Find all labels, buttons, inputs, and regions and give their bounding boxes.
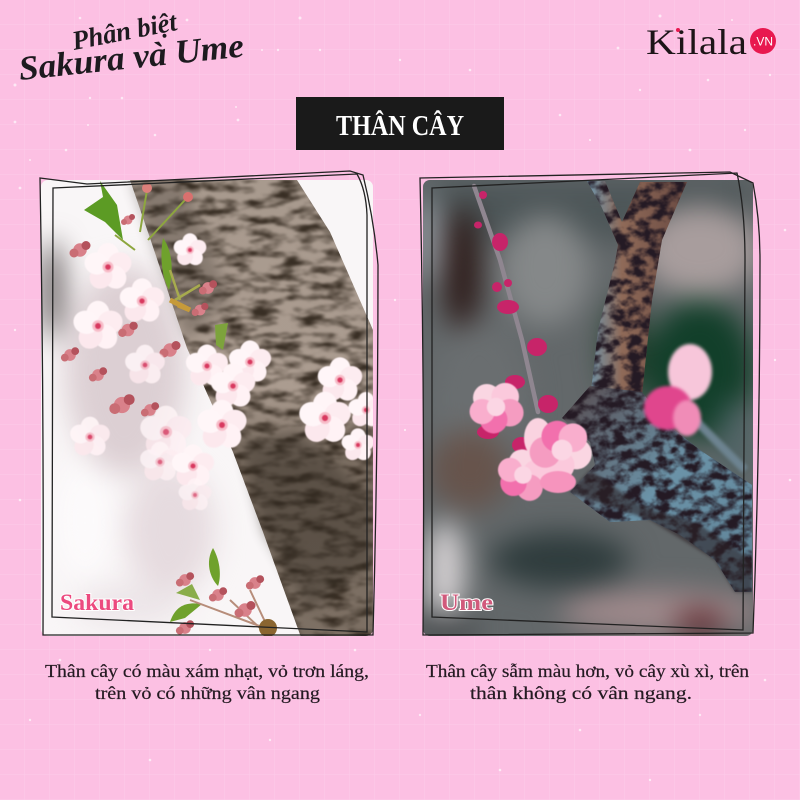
buds [474, 191, 558, 453]
trunk shadow at blossom [240, 430, 373, 610]
text: sakura description: trên vỏ có những vân ngang [95, 683, 320, 703]
heading banner: THÂN CÂY [336, 111, 464, 142]
ume blossoms [468, 382, 592, 502]
panel: ume photo [411, 180, 760, 640]
trunk shadow top [130, 180, 230, 340]
text: ume description: thân không có vân ngang. [470, 683, 692, 703]
frame: ume hand-drawn border [420, 172, 760, 635]
text: ume description: Thân cây sẫm màu hơn, vỏ cây xù xì, trên [426, 661, 749, 681]
panel: sakura photo [41, 180, 386, 640]
title [17, 6, 246, 88]
tree trunk [130, 180, 373, 640]
text: sakura description [45, 661, 369, 703]
logo: Kilala.VN: Kilala [646, 22, 747, 62]
text: ume description [426, 661, 749, 703]
blossoms [68, 233, 386, 513]
buds [61, 214, 217, 416]
background blossom [644, 344, 712, 436]
thin twig [474, 186, 538, 412]
label: Ume: Ume [440, 590, 493, 615]
upper branches [587, 181, 687, 400]
logo: Kilala.VN: .VN [753, 34, 773, 48]
blurred background [411, 180, 760, 640]
trunk underside shadow [570, 470, 752, 592]
title: Sakura và Ume [17, 28, 246, 88]
heading banner [296, 97, 504, 150]
logo: Kilala.VN [646, 22, 776, 62]
lower trunk [562, 386, 752, 592]
text: sakura description: Thân cây có màu xám nhạt, vỏ trơn láng, [45, 661, 369, 681]
leaves and stems top [84, 181, 228, 350]
title: Phân biệt [68, 6, 181, 56]
label: Sakura: Sakura [60, 590, 135, 615]
lower sprig [170, 548, 277, 637]
branch in background [695, 420, 745, 470]
frame: sakura hand-drawn border [40, 171, 378, 635]
blurred background [42, 240, 215, 627]
